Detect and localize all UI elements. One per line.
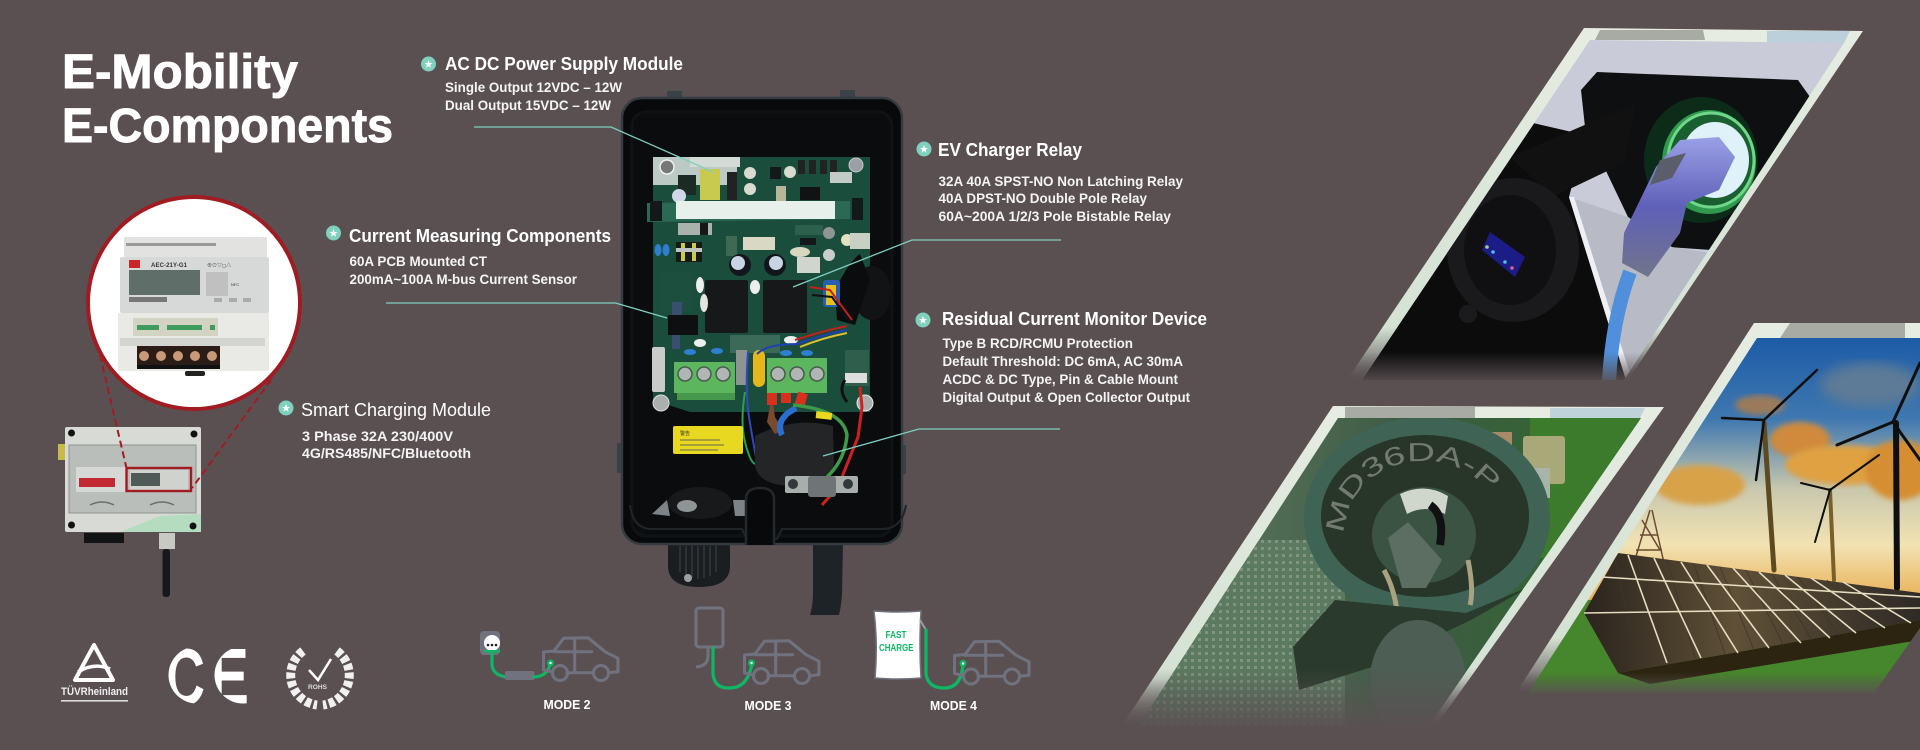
terminal blocks — [674, 362, 735, 393]
label: mode 4: MODE 4 — [930, 699, 977, 713]
green ring — [1644, 97, 1758, 223]
charging mode 4 icon — [874, 611, 1029, 688]
solar array — [1584, 553, 1920, 673]
label: mode 2: MODE 2 — [544, 698, 591, 712]
leader line: power supply — [474, 127, 713, 172]
zoom dashed connectors — [100, 355, 271, 488]
centre latch — [746, 488, 774, 545]
wallbox cover — [1447, 178, 1579, 322]
callout: smart charging module: 4G/RS485/NFC/Bluetooth — [302, 446, 471, 461]
callout: current measuring components: 60A PCB Mounted CT — [350, 254, 488, 269]
sensor ring: MD36DA-P — [1326, 443, 1499, 531]
pylon — [1636, 510, 1664, 560]
callout: smart charging module — [278, 400, 491, 461]
leader line: residual current — [823, 429, 1060, 456]
callout: current measuring components: Current Measuring Components — [349, 226, 611, 246]
certification: TUV Rheinland: TÜVRheinland — [61, 685, 128, 698]
callout: AC DC power supply module: AC DC Power Supply Module — [445, 54, 683, 74]
callout: AC DC power supply module: Dual Output 15VDC – 12W — [445, 98, 611, 113]
certification: TUV Rheinland — [61, 645, 128, 702]
product photo: EV charger open enclosure — [617, 90, 906, 615]
circuit board — [647, 157, 873, 412]
charging mode 4 icon: FAST — [886, 629, 907, 641]
display strip — [647, 201, 850, 222]
certification: CE mark: C — [165, 632, 205, 721]
callout: residual current monitor device: Default Threshold: DC 6mA, AC 30mA — [942, 354, 1183, 369]
energy meter: ⊕⊙▽◻△ — [207, 262, 231, 269]
grass — [1529, 600, 1920, 692]
sensor ring — [1304, 418, 1550, 613]
certification: CE mark: E — [209, 632, 249, 721]
magnified meter circle — [88, 197, 300, 409]
plug handle — [1622, 137, 1735, 277]
wires — [742, 287, 852, 464]
ferrite ring residual current sensor — [755, 380, 862, 505]
callout: current measuring components: 200mA~100A M-bus Current Sensor — [350, 272, 578, 287]
sensor marking — [1344, 461, 1500, 534]
callout: residual current monitor device: Residual Current Monitor Device — [942, 309, 1207, 329]
clouds — [1655, 363, 1920, 505]
energy meter: AEC-21Y-G1 — [151, 263, 188, 269]
lower board parts — [678, 223, 712, 235]
callout: EV charger relay: EV Charger Relay — [938, 140, 1082, 160]
product: smart charging module box — [58, 427, 201, 597]
callout: EV charger relay: 60A~200A 1/2/3 Pole Bistable Relay — [938, 209, 1171, 224]
cable gland — [668, 544, 730, 587]
certification: RoHS wreath: ROHS — [308, 684, 328, 691]
photo panel: wind turbines and solar array — [1500, 323, 1920, 700]
label — [652, 347, 665, 392]
photo panel: current sensor — [1130, 406, 1664, 722]
LED indicator — [1482, 232, 1525, 277]
leader line: current measuring — [386, 303, 667, 318]
charging mode 2 icon — [480, 631, 618, 680]
rubber grommet — [652, 487, 745, 519]
callout: EV charger relay: 32A 40A SPST-NO Non Latching Relay — [938, 174, 1183, 189]
title: E-Mobility — [62, 46, 298, 99]
leader line: relay — [793, 240, 1061, 287]
wind turbines — [1722, 363, 1920, 588]
relays — [705, 280, 748, 333]
side tabs and top tabs — [617, 90, 906, 474]
callout: residual current monitor device: Type B RCD/RCMU Protection — [942, 336, 1133, 351]
label: mode 3: MODE 3 — [744, 699, 792, 713]
silver body wedge — [1569, 197, 1711, 380]
certification: RoHS wreath — [291, 651, 349, 705]
callout: AC DC power supply module: Single Output 12VDC – 12W — [445, 80, 622, 95]
callout: current measuring components — [326, 226, 611, 287]
title: E-Components — [62, 100, 393, 153]
warning label: 警告 — [680, 430, 690, 437]
title — [62, 46, 393, 153]
callout: residual current monitor device — [916, 309, 1207, 405]
callout: AC DC power supply module — [421, 54, 683, 113]
flap — [1511, 124, 1606, 188]
callout: residual current monitor device: ACDC & DC Type, Pin & Cable Mount — [942, 372, 1178, 387]
callout: EV charger relay: 40A DPST-NO Double Pole Relay — [938, 191, 1147, 206]
power cable — [810, 540, 843, 615]
callout: smart charging module: 3 Phase 32A 230/400V — [302, 429, 453, 444]
photo panel: EV charging plug — [1340, 28, 1863, 384]
callout: EV charger relay — [916, 140, 1183, 224]
certification: CE mark — [168, 648, 247, 704]
charging mode 4 icon: CHARGE — [879, 642, 914, 654]
warning label — [673, 426, 743, 454]
current sensor — [668, 315, 698, 335]
callout: smart charging module: Smart Charging Module — [301, 400, 491, 420]
black cap at right — [853, 266, 891, 320]
energy meter — [118, 237, 269, 376]
charging port recess — [1581, 72, 1810, 250]
charging mode 3 icon — [696, 608, 819, 688]
mounting clamp — [785, 476, 858, 497]
mounting tab — [1293, 587, 1529, 690]
enclosure body — [622, 98, 902, 544]
callout: residual current monitor device: Digital Output & Open Collector Output — [942, 390, 1190, 405]
blue cable — [1609, 272, 1630, 382]
energy meter: NFC — [231, 282, 239, 287]
